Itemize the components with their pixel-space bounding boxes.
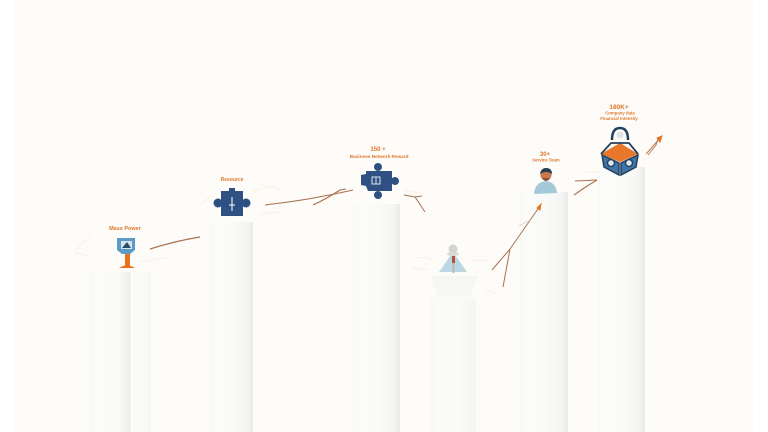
arrow: step 1 to 2 xyxy=(150,237,200,249)
arrow: beyond step 6 xyxy=(646,136,662,155)
column 6 xyxy=(598,167,645,432)
label: step 3: 150 + xyxy=(370,147,386,153)
icon: blue signpost xyxy=(117,238,135,268)
label: step 5: Service Team xyxy=(532,158,560,162)
icon: puzzle piece large xyxy=(361,163,399,199)
arrow: step 5 to 6 xyxy=(574,180,597,195)
label: step 5: 30+ xyxy=(540,152,551,158)
arrow: step 3 to 4 xyxy=(404,195,425,212)
arrow: step 2 to 3 xyxy=(265,189,353,205)
icon: person xyxy=(534,168,557,194)
column 5 xyxy=(520,192,568,432)
icon: puzzle piece navy xyxy=(214,188,250,216)
bowl capital xyxy=(431,276,478,297)
column 4 xyxy=(430,298,476,432)
icon: figure on triangle xyxy=(439,244,467,273)
label: step 2: Resource xyxy=(221,177,244,183)
icon: house cube xyxy=(601,128,638,175)
label: step 3: Business Network Reward xyxy=(350,154,409,159)
label: step 6: Company data xyxy=(605,110,635,116)
label: step 3 xyxy=(350,147,409,159)
arrow: step 4 to 5 xyxy=(492,204,541,287)
label: step 6: Financial Intensity xyxy=(600,116,638,121)
column 3 xyxy=(353,204,400,432)
faint sketch strokes xyxy=(75,152,655,294)
label: step 6 xyxy=(600,104,638,121)
label: step 1: Mass Power xyxy=(109,226,142,232)
label: step 6: 180K+ xyxy=(609,104,629,111)
column 2 xyxy=(210,222,253,432)
label: step 5 xyxy=(532,152,560,162)
column 1 xyxy=(89,272,151,432)
